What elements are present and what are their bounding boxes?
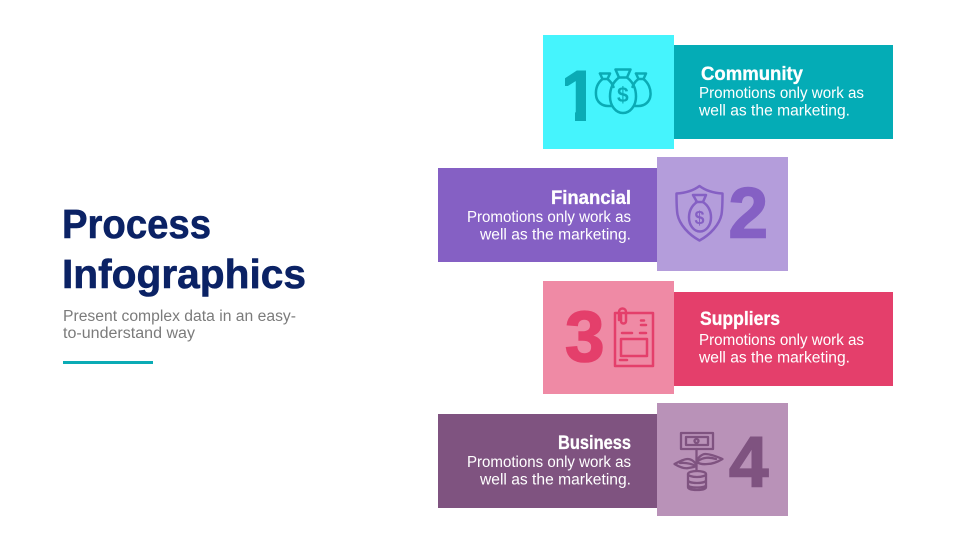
number 3: 3 bbox=[565, 298, 604, 377]
suppliers band bbox=[674, 292, 893, 386]
icon: dollar sign: $ bbox=[694, 208, 705, 228]
panel: financial bbox=[438, 157, 788, 271]
icon: money bags bbox=[596, 70, 651, 113]
subtitle: Present complex data in an easy- bbox=[63, 308, 296, 325]
title bbox=[62, 201, 306, 297]
financial heading: Financial bbox=[551, 188, 631, 209]
business band bbox=[438, 414, 658, 508]
panel: suppliers bbox=[543, 281, 893, 394]
financial band bbox=[438, 168, 658, 262]
financial text: well as the marketing. bbox=[479, 226, 631, 244]
business text: Promotions only work as bbox=[467, 454, 631, 471]
business number box bbox=[657, 403, 788, 516]
community number box bbox=[543, 35, 674, 149]
financial text bbox=[467, 209, 631, 244]
icon: document with clip bbox=[615, 308, 653, 366]
panel: community bbox=[543, 35, 893, 149]
icon: dollar sign: $ bbox=[617, 84, 629, 107]
community heading: Community bbox=[701, 64, 803, 85]
community text: Promotions only work as bbox=[699, 85, 864, 102]
title: Process bbox=[62, 201, 211, 247]
business text bbox=[467, 454, 631, 488]
number 2: 2 bbox=[728, 174, 768, 254]
community band bbox=[674, 45, 893, 139]
icon: money plant bbox=[674, 433, 722, 490]
financial number box bbox=[657, 157, 788, 271]
suppliers text bbox=[698, 332, 864, 366]
suppliers text: Promotions only work as bbox=[699, 332, 864, 349]
suppliers text: well as the marketing. bbox=[698, 350, 850, 366]
number 1: 1 bbox=[560, 58, 600, 136]
business text: well as the marketing. bbox=[479, 472, 631, 488]
business heading: Business bbox=[558, 433, 631, 454]
icon: shield with bag bbox=[676, 186, 722, 240]
community text: well as the marketing. bbox=[698, 102, 850, 120]
subtitle: to-understand way bbox=[63, 325, 195, 342]
suppliers heading: Suppliers bbox=[700, 309, 780, 330]
community text bbox=[698, 85, 864, 120]
number 4: 4 bbox=[729, 424, 769, 502]
accent line bbox=[63, 361, 153, 364]
suppliers number box bbox=[543, 281, 674, 394]
subtitle bbox=[63, 308, 296, 342]
panel: business bbox=[438, 403, 788, 516]
financial text: Promotions only work as bbox=[467, 209, 631, 226]
title: Infographics bbox=[62, 251, 306, 297]
